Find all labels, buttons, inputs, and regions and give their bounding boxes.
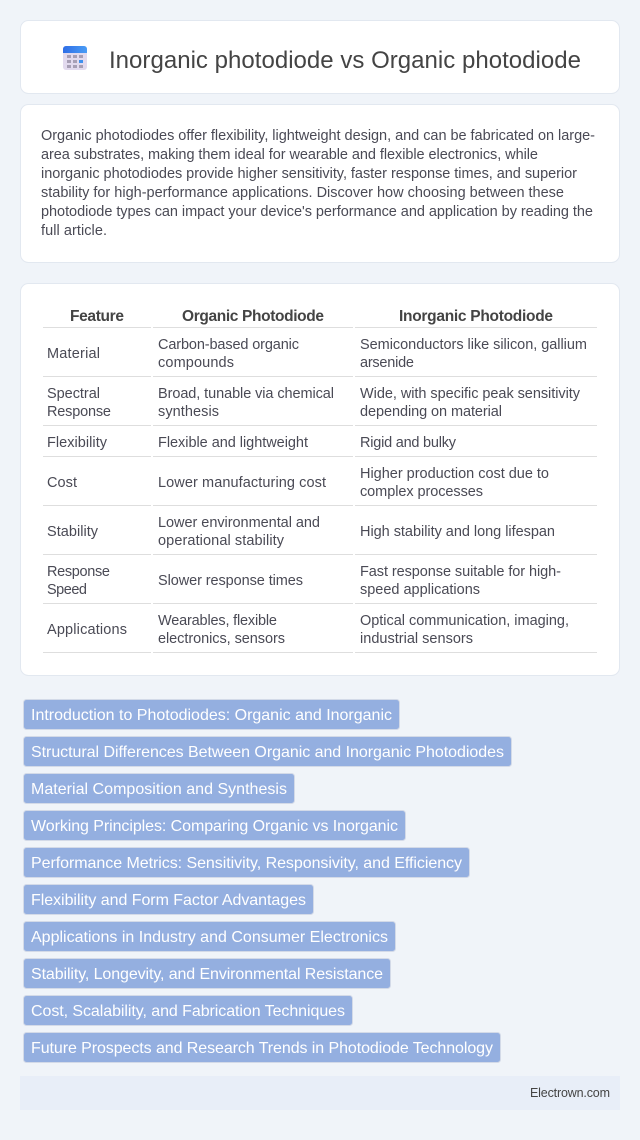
tag: introduction: Introduction to Photodiodes: Organic and Inorganic: [31, 707, 392, 724]
table header: [70, 308, 553, 325]
table header: Inorganic Photodiode: [399, 308, 553, 325]
row: material: compounds: [158, 355, 234, 371]
row: applications: electronics, sensors: [158, 631, 285, 647]
panel: introduction: [20, 104, 620, 262]
icon: calendar: [63, 46, 87, 70]
row: spectral response: Response: [47, 404, 111, 420]
row: material: Semiconductors like silicon, gallium: [360, 337, 587, 353]
row: stability: Stability: [47, 524, 99, 540]
row: cost: Lower manufacturing cost: [158, 475, 326, 491]
text block: intro paragraph: Organic photodiodes offer flexibility, lightweight design, and can be fabricated on large-: [41, 128, 595, 144]
row: spectral response: depending on material: [360, 404, 502, 420]
row: applications: Optical communication, imaging,: [360, 613, 569, 629]
tag: cost: [24, 996, 352, 1026]
row: spectral response: Wide, with specific peak sensitivity: [360, 386, 581, 402]
row: response speed: Response: [47, 564, 110, 580]
row: spectral response: Spectral: [47, 386, 100, 402]
row: cost: complex processes: [360, 484, 483, 500]
text block: intro paragraph: area substrates, making them ideal for wearable and flexible electronics, while: [41, 147, 538, 163]
tag: working principles: [24, 810, 406, 840]
row: stability: High stability and long lifespan: [360, 524, 555, 540]
row: flexibility: Flexibility: [47, 435, 108, 451]
tag: future prospects: [24, 1032, 500, 1062]
row: material: Material: [47, 346, 100, 362]
panel: title header: [20, 20, 620, 94]
tag: flexibility: [24, 884, 314, 914]
tag: working principles: Working Principles: Comparing Organic vs Inorganic: [31, 818, 398, 835]
footer: Electrown.com: [530, 1086, 610, 1100]
title: Inorganic photodiode vs Organic photodiode: [109, 47, 581, 74]
row: response speed: Slower response times: [158, 573, 303, 589]
text block: intro paragraph: inorganic photodiodes provide higher sensitivity, faster response times, and superior: [41, 166, 577, 182]
row: stability: operational stability: [158, 533, 285, 549]
row: response speed: [47, 564, 561, 598]
row: flexibility: Flexible and lightweight: [158, 435, 308, 451]
row: stability: Lower environmental and: [158, 515, 320, 531]
row: response speed: speed applications: [360, 582, 480, 598]
tag: material composition: [24, 774, 294, 804]
row: material: arsenide: [360, 355, 414, 371]
tag: applications: [24, 922, 396, 952]
row: material: [47, 337, 587, 371]
text block: intro paragraph: photodiode types can impact your device's performance and application by reading the: [41, 204, 593, 220]
row: applications: industrial sensors: [360, 631, 473, 647]
tag: future prospects: Future Prospects and Research Trends in Photodiode Technology: [31, 1040, 493, 1057]
panel: comparison table: [20, 284, 620, 676]
text block: intro paragraph: stability for high-performance applications. Discover how choosing between these: [41, 185, 564, 201]
tag: structural differences: [24, 736, 512, 766]
tag: material composition: Material Composition and Synthesis: [31, 781, 287, 798]
tag: introduction: [24, 700, 400, 730]
row: cost: Higher production cost due to: [360, 466, 549, 482]
table header: Organic Photodiode: [182, 308, 324, 325]
row: flexibility: Rigid and bulky: [360, 435, 457, 451]
text block: intro paragraph: full article.: [41, 223, 107, 239]
tag: cost: Cost, Scalability, and Fabrication Techniques: [31, 1003, 345, 1020]
topic links list: [24, 700, 512, 1062]
tag: stability: [24, 958, 390, 988]
row: cost: [47, 466, 549, 500]
row: applications: Applications: [47, 622, 127, 638]
footer: [20, 1076, 620, 1110]
text block: intro paragraph: [41, 128, 595, 239]
row: applications: [47, 613, 569, 647]
row: spectral response: Broad, tunable via chemical: [158, 386, 334, 402]
row: stability: [47, 515, 555, 549]
row: applications: Wearables, flexible: [158, 613, 277, 629]
tag: flexibility: Flexibility and Form Factor Advantages: [31, 892, 306, 909]
tag: applications: Applications in Industry and Consumer Electronics: [31, 929, 388, 946]
row: cost: Cost: [47, 475, 77, 491]
row: material: Carbon-based organic: [158, 337, 299, 353]
row: spectral response: [47, 386, 581, 420]
table header: Feature: [70, 308, 124, 325]
tag: performance metrics: Performance Metrics: Sensitivity, Responsivity, and Efficiency: [31, 855, 462, 872]
tag: structural differences: Structural Differences Between Organic and Inorganic Photodiodes: [31, 744, 504, 761]
row: flexibility: [47, 435, 457, 451]
row: response speed: Fast response suitable for high-: [360, 564, 561, 580]
row: spectral response: synthesis: [158, 404, 219, 420]
tag: stability: Stability, Longevity, and Environmental Resistance: [31, 966, 383, 983]
row: response speed: Speed: [47, 582, 87, 598]
tag: performance metrics: [24, 848, 470, 878]
